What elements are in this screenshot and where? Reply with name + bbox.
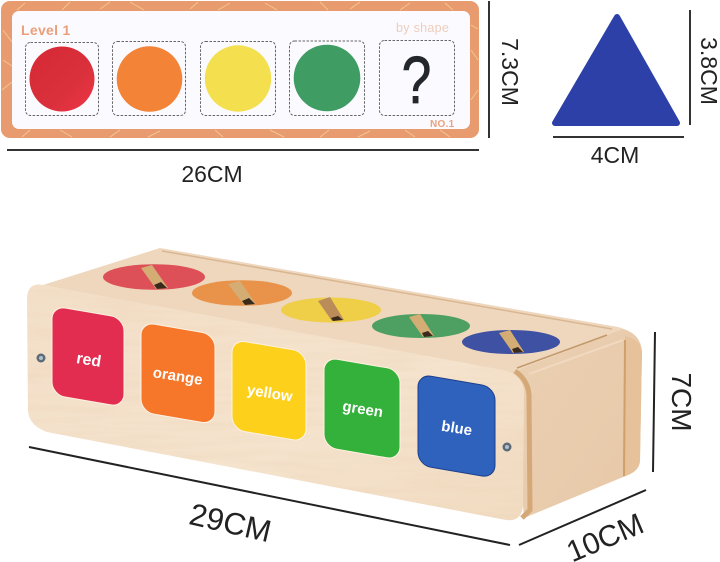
tile: blue: blue — [440, 418, 473, 439]
hole: yellow — [281, 297, 381, 322]
slot: question mark: ? — [402, 42, 431, 117]
hole: orange — [192, 280, 292, 306]
dimension: box length 29CM — [29, 447, 510, 549]
card heading: Level 1: Level 1 — [21, 22, 71, 38]
tile: green: green — [341, 398, 384, 421]
icon: left screw — [36, 354, 46, 362]
dimension: card height 7.3CM: 7.3CM — [497, 38, 523, 106]
slot: yellow circle — [200, 42, 276, 116]
dimension: triangle height 3.8CM — [690, 10, 720, 125]
tile: green — [324, 357, 400, 460]
dimension: box length 29CM: 29CM — [186, 496, 275, 549]
slot: green circle — [290, 41, 364, 116]
card label: NO.1: NO.1 — [430, 119, 455, 130]
panel: level 1 card — [1, 1, 479, 138]
tile: orange — [141, 322, 215, 425]
dimension: triangle width 4CM: 4CM — [591, 142, 639, 168]
dimension: card height 7.3CM — [489, 1, 523, 138]
tile: red — [52, 306, 124, 407]
hole: green — [372, 314, 470, 338]
dimension: triangle width 4CM — [553, 137, 684, 168]
tile: yellow: yellow — [246, 382, 294, 406]
icon: blue triangle block — [555, 17, 677, 123]
card label: by shape: by shape — [396, 21, 449, 35]
box front face — [27, 285, 524, 520]
dimension: box height 7CM: 7CM — [666, 372, 697, 432]
slot: orange circle — [112, 42, 186, 116]
tile: red: red — [75, 350, 102, 371]
icon: right screw — [502, 442, 512, 452]
tile: orange: orange — [152, 364, 204, 389]
dimension: box depth 10CM — [519, 490, 649, 562]
box top face — [43, 248, 630, 378]
slot: red circle — [26, 42, 98, 116]
hole: blue — [462, 330, 560, 354]
box side face — [513, 329, 642, 518]
tile: blue — [418, 374, 495, 478]
slot: question mark — [380, 40, 454, 117]
panel: wooden sorting box — [27, 248, 642, 520]
hole: red — [103, 264, 205, 290]
dimension: box height 7CM — [653, 332, 697, 472]
dimension: card width 26CM: 26CM — [181, 161, 243, 187]
tile: yellow — [232, 339, 306, 442]
